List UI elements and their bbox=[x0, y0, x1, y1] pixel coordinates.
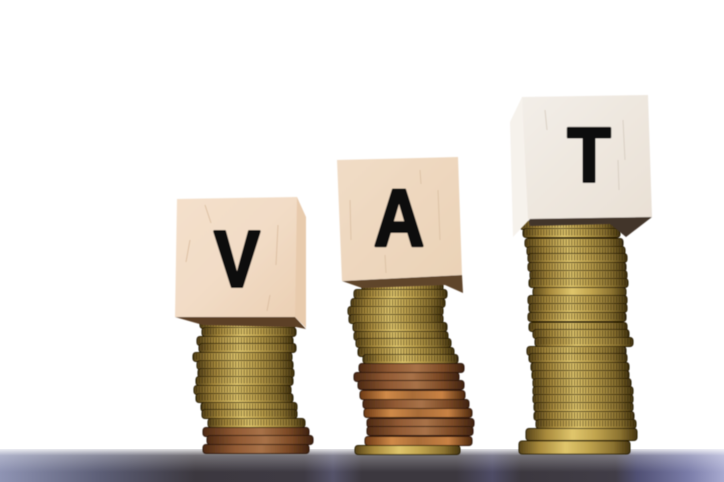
table surface bbox=[0, 449, 724, 482]
coin stack under T bbox=[519, 220, 637, 454]
letter V: V bbox=[214, 214, 260, 304]
wooden block A bbox=[337, 157, 463, 293]
coin stack under A bbox=[348, 282, 474, 454]
coin stack under V bbox=[193, 320, 313, 454]
wooden block V bbox=[175, 197, 306, 329]
letter A: A bbox=[374, 174, 424, 264]
letter T: T bbox=[567, 112, 611, 198]
wooden block T bbox=[510, 95, 652, 237]
